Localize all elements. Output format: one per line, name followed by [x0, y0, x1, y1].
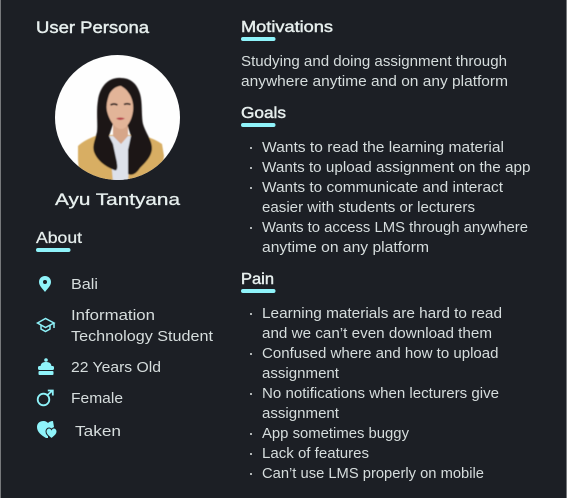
- text: motivations body: [241, 54, 508, 90]
- text: occupation: Information: [71, 308, 155, 324]
- list: pain points: assignment: [262, 366, 339, 382]
- list: pain points: Lack of features: [262, 446, 369, 462]
- text: motivations body: Studying and doing assignment through: [241, 54, 507, 70]
- list: pain points: and we can’t even download them: [262, 326, 492, 342]
- list: pain points: Confused where and how to upload: [262, 346, 498, 362]
- icon: graduation cap: [38, 318, 54, 332]
- heading: motivations: Motivations: [241, 19, 333, 36]
- text: occupation: Technology Student: [71, 329, 213, 345]
- text: motivations body: anywhere anytime and on any platform: [241, 74, 508, 90]
- text: age: 22 Years Old: [71, 360, 161, 376]
- panel: motivations: [241, 19, 508, 90]
- list: goals: [250, 140, 530, 256]
- panel: profile: [36, 18, 181, 209]
- list: goals: Wants to read the learning material: [262, 140, 504, 156]
- list: goals: anytime on any platform: [262, 240, 429, 256]
- list: pain points: Can’t use LMS properly on mobile: [262, 466, 484, 482]
- panel: pain: [241, 271, 502, 482]
- icon: birthday cake: [38, 358, 54, 375]
- list: pain points: [250, 306, 502, 482]
- panel: goals: [241, 105, 530, 256]
- text: occupation: [71, 308, 213, 345]
- icon: location pin: [39, 276, 51, 292]
- list: pain points: App sometimes buggy: [262, 426, 410, 442]
- heading: pain: Pain: [241, 271, 274, 288]
- list: pain points: No notifications when lecturers give: [262, 386, 499, 402]
- panel: about: [36, 230, 213, 440]
- heading: goals: Goals: [241, 105, 286, 122]
- list: goals: Wants to upload assignment on the app: [262, 160, 530, 176]
- text: gender: Female: [71, 391, 123, 407]
- portrait photo: [55, 55, 180, 182]
- text: location: Bali: [71, 277, 98, 293]
- name: Ayu Tantyana: [55, 190, 181, 209]
- text: relationship status: Taken: [75, 424, 121, 440]
- list: goals: Wants to communicate and interact: [262, 180, 503, 196]
- list: pain points: Learning materials are hard to read: [262, 306, 502, 322]
- icon: gender symbol: [38, 390, 53, 405]
- list: pain points: assignment: [262, 406, 339, 422]
- list: goals: easier with students or lecturers: [262, 200, 475, 216]
- icon: hearts: [37, 421, 57, 438]
- list: goals: Wants to access LMS through anywhere: [262, 220, 528, 236]
- title: User Persona: [36, 18, 150, 37]
- heading: about: About: [36, 230, 83, 247]
